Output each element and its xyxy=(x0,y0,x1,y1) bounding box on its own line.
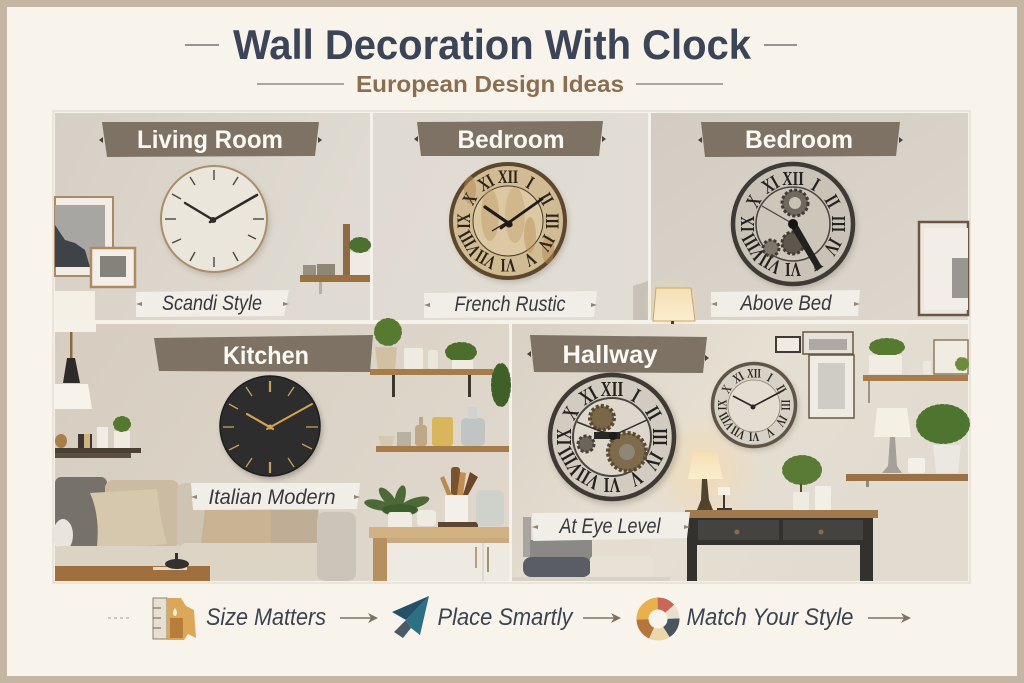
heading banner: kitchen xyxy=(154,335,373,372)
clock: hallway gears: III xyxy=(648,428,671,446)
cabinet with plant and utensils xyxy=(363,467,509,581)
clock: industrial gears: III xyxy=(827,216,850,233)
clock: hallway gears: IX xyxy=(553,429,576,445)
clock: french rustic xyxy=(451,164,568,282)
clock: industrial gears: II xyxy=(820,190,846,212)
left shelf with decor xyxy=(55,418,141,458)
framed art xyxy=(919,222,968,315)
style ribbon: french rustic: French Rustic xyxy=(454,293,566,316)
clock: hallway gears: VI xyxy=(604,473,620,496)
clock: hallway roman: VII xyxy=(729,422,748,441)
tip text: match your style: Match Your Style xyxy=(686,604,854,631)
small framed photo xyxy=(91,248,135,287)
icon: navigation arrow xyxy=(392,596,429,638)
clock: french rustic: II xyxy=(534,189,558,209)
panel: bedroom above bed xyxy=(642,113,968,336)
style ribbon: italian modern xyxy=(191,483,360,510)
bottom tips row xyxy=(108,596,911,640)
lamp glow xyxy=(642,275,702,335)
style ribbon: above bed: Above Bed xyxy=(739,292,833,315)
lamp glow on wall xyxy=(645,410,765,530)
console table xyxy=(685,510,878,581)
small frames xyxy=(776,332,854,418)
heading banner: living room xyxy=(99,122,322,157)
clock: industrial gears: IV xyxy=(819,234,847,260)
table lamp xyxy=(653,288,695,336)
arrow xyxy=(868,613,911,623)
floor lamp xyxy=(55,320,96,409)
clock: hallway roman: XII xyxy=(747,367,762,381)
clock: hallway roman: XI xyxy=(731,369,747,387)
clock: italian modern xyxy=(220,376,322,479)
clock: hallway gears xyxy=(549,375,679,505)
clock: industrial gears: IX xyxy=(736,216,759,232)
clock: french rustic: VII xyxy=(472,245,500,274)
lower shelf with lamp and plant xyxy=(846,406,968,487)
style ribbon: scandi: Scandi Style xyxy=(162,292,262,315)
clock: hallway gears: II xyxy=(641,402,666,424)
clock: industrial gears: VIII xyxy=(736,229,770,264)
clock: hallway gears: VIII xyxy=(553,443,588,479)
clock: industrial gears: VII xyxy=(755,248,785,279)
panel: hallway xyxy=(512,324,968,581)
clock: french rustic: I xyxy=(522,172,538,193)
title: Wall Decoration With Clock xyxy=(233,21,752,68)
clock: hallway roman: III xyxy=(778,400,792,411)
clock: french rustic: XII xyxy=(498,166,518,188)
subtitle: European Design Ideas xyxy=(356,71,624,97)
bench with cushions xyxy=(512,517,670,581)
clock: industrial gears: I xyxy=(808,173,824,196)
clock: french rustic: VI xyxy=(500,254,516,276)
clock: hallway roman: I xyxy=(764,371,775,385)
heading banner: bedroom xyxy=(698,122,903,157)
clock: hallway roman: VIII xyxy=(717,409,738,432)
style ribbon: at eye level: At Eye Level xyxy=(558,515,662,538)
sofa xyxy=(53,477,356,581)
style ribbon: above bed xyxy=(711,290,860,317)
upper shelf with plant xyxy=(863,340,968,403)
clock: french rustic: IX xyxy=(453,213,475,229)
clock: hallway gears: I xyxy=(628,384,644,407)
arrow xyxy=(340,613,378,623)
clock: hallway gears: IV xyxy=(639,448,668,474)
clock: french rustic: V xyxy=(520,247,540,271)
heading banner: bedroom: Bedroom xyxy=(745,126,853,154)
tip text: place smartly: Place Smartly xyxy=(438,604,574,631)
clock: hallway gears: VII xyxy=(573,463,604,494)
clock: hallway roman: IX xyxy=(716,399,730,410)
clock: french rustic: XI xyxy=(474,169,498,196)
header xyxy=(185,21,797,97)
icon: colour wheel xyxy=(642,604,674,634)
clock: industrial gears: VI xyxy=(785,258,801,281)
clock: hallway gears: XI xyxy=(575,381,601,410)
panel: living room xyxy=(55,113,370,320)
upper right shelf xyxy=(370,320,509,405)
wall shelf with plant xyxy=(300,224,370,294)
heading banner: bedroom xyxy=(414,121,606,156)
clock: french rustic: X xyxy=(458,189,482,209)
table decor xyxy=(717,457,831,510)
panel: bedroom french rustic xyxy=(373,113,648,320)
clock: hallway roman: X xyxy=(720,383,735,396)
heading banner: living room: Living Room xyxy=(137,126,283,154)
clock: scandi xyxy=(161,166,270,276)
heading banner: hallway: Hallway xyxy=(562,341,658,369)
corner object xyxy=(633,281,648,320)
clock: hallway roman: V xyxy=(763,424,776,440)
tip text: size matters: Size Matters xyxy=(206,604,326,631)
style ribbon: at eye level xyxy=(532,512,690,541)
icon: ruler xyxy=(153,598,196,640)
clock: french rustic: VIII xyxy=(454,227,486,260)
clock: french rustic: IV xyxy=(533,231,560,255)
style ribbon: italian modern: Italian Modern xyxy=(208,486,336,509)
clock: industrial gears: XI xyxy=(757,170,783,198)
panel: kitchen xyxy=(53,320,509,581)
clock: industrial gears: V xyxy=(805,251,826,276)
arrow xyxy=(583,613,621,623)
clock: industrial gears: X xyxy=(741,191,766,211)
middle right shelf xyxy=(376,407,509,452)
clock: hallway roman xyxy=(712,364,799,451)
clock: industrial gears xyxy=(733,164,857,289)
clock: hallway gears: X xyxy=(558,403,583,424)
framed art xyxy=(55,197,113,276)
clock: industrial gears: XII xyxy=(782,167,804,190)
heading banner: kitchen: Kitchen xyxy=(223,342,309,370)
table lamp xyxy=(688,452,723,510)
clock: french rustic: III xyxy=(541,213,563,229)
clock: hallway gears: XII xyxy=(601,378,623,401)
clock: hallway roman: VI xyxy=(748,429,759,443)
style ribbon: french rustic xyxy=(424,291,597,318)
clock: hallway gears: V xyxy=(625,466,646,491)
clock: hallway roman: IV xyxy=(772,413,789,429)
style ribbon: scandi xyxy=(136,290,289,317)
clock: hallway roman: II xyxy=(773,383,789,397)
heading banner: bedroom: Bedroom xyxy=(458,126,564,154)
image collage frame xyxy=(53,111,970,583)
table lamp shade xyxy=(55,291,95,320)
heading banner: hallway xyxy=(527,335,709,373)
